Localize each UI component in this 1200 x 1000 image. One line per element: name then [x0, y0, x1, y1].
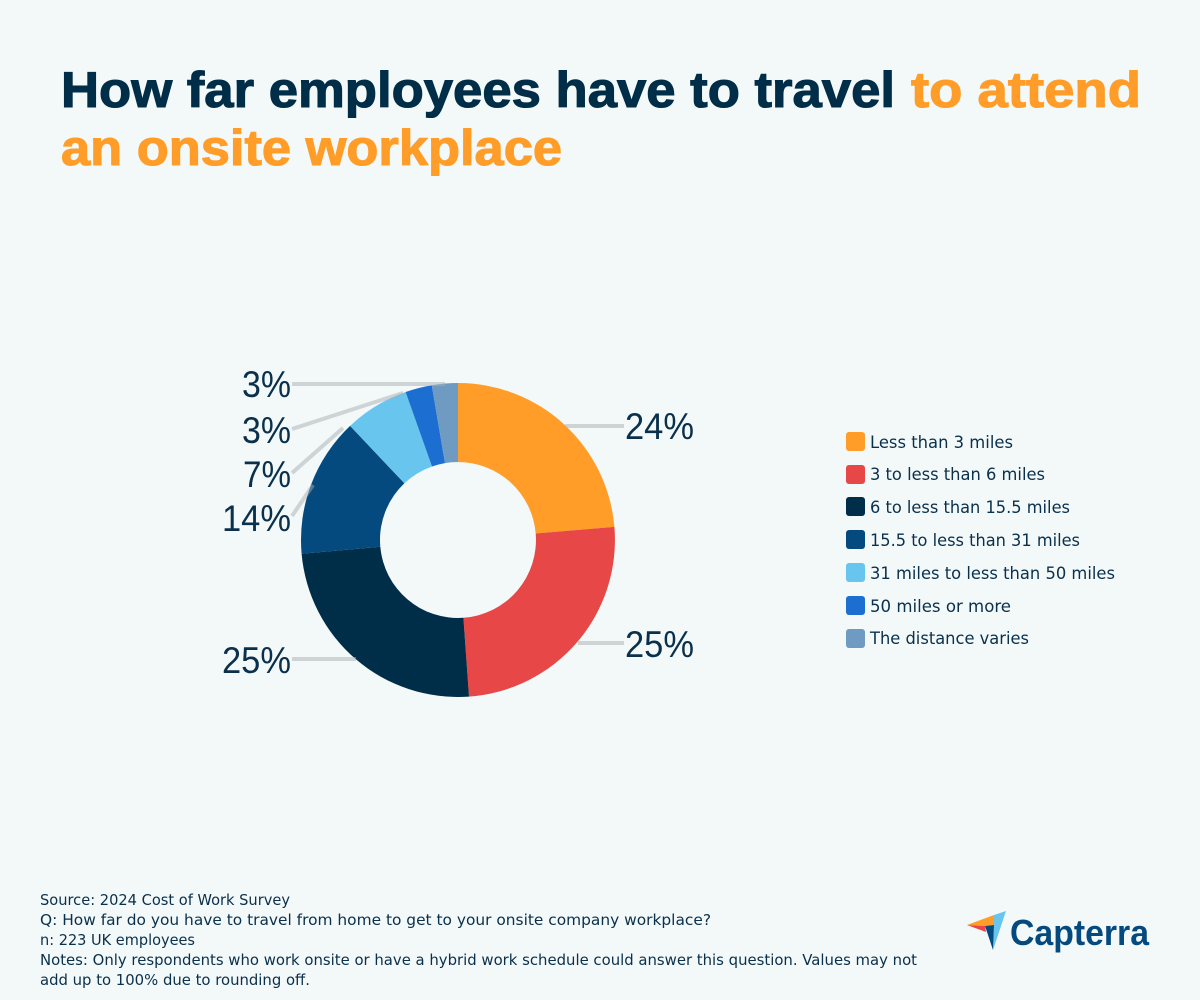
source notes: n: 223 UK employees — [40, 931, 195, 949]
percentage labels — [222, 364, 694, 681]
percentage labels: 7% — [243, 454, 291, 495]
legend item: 6 to less than 15.5 miles: 6 to less than 15.5 miles — [870, 498, 1070, 518]
source notes: add up to 100% due to rounding off. — [40, 971, 310, 989]
percentage labels: 14% — [222, 498, 291, 539]
title: How far employees have to travel — [61, 62, 895, 118]
source notes — [40, 891, 917, 989]
segment: 6 to less than 15.5 miles 25% — [302, 547, 469, 697]
legend item: 31 miles to less than 50 miles: 31 miles to less than 50 miles — [870, 564, 1115, 584]
percentage labels: 25% — [625, 624, 694, 665]
legend item: less than 3 miles: Less than 3 miles — [870, 433, 1013, 453]
title: to attend — [911, 62, 1141, 118]
legend item: 50 miles or more: 50 miles or more — [870, 597, 1011, 617]
segment: 15.5 to less than 31 miles 14% — [301, 426, 404, 554]
capterra logo: Capterra — [1010, 912, 1150, 953]
legend — [846, 432, 1115, 649]
percentage labels: 3% — [242, 410, 291, 451]
segment: 3 to less than 6 miles 25% — [463, 527, 615, 697]
source notes: Q: How far do you have to travel from home to get to your onsite company workplace? — [40, 911, 711, 929]
source notes: Notes: Only respondents who work onsite or have a hybrid work schedule could answer this question. Values may not — [40, 951, 917, 969]
legend item: 3 to less than 6 miles: 3 to less than 6 miles — [870, 465, 1045, 485]
legend item: 15.5 to less than 31 miles: 15.5 to less than 31 miles — [870, 531, 1080, 551]
source notes: Source: 2024 Cost of Work Survey — [40, 891, 290, 909]
segment: 50 miles or more 3% — [406, 385, 445, 466]
title: an onsite workplace — [61, 120, 562, 176]
segment: less than 3 miles 24% — [458, 383, 614, 534]
leader lines — [292, 384, 624, 659]
donut chart — [301, 383, 615, 697]
percentage labels: 24% — [625, 406, 694, 447]
segment: 31 to less than 50 miles 7% — [350, 392, 432, 483]
segment: the distance varies 3% — [432, 383, 458, 463]
percentage labels: 3% — [242, 364, 291, 405]
percentage labels: 25% — [222, 640, 291, 681]
title — [61, 62, 1141, 176]
legend item: the distance varies: The distance varies — [869, 629, 1029, 649]
